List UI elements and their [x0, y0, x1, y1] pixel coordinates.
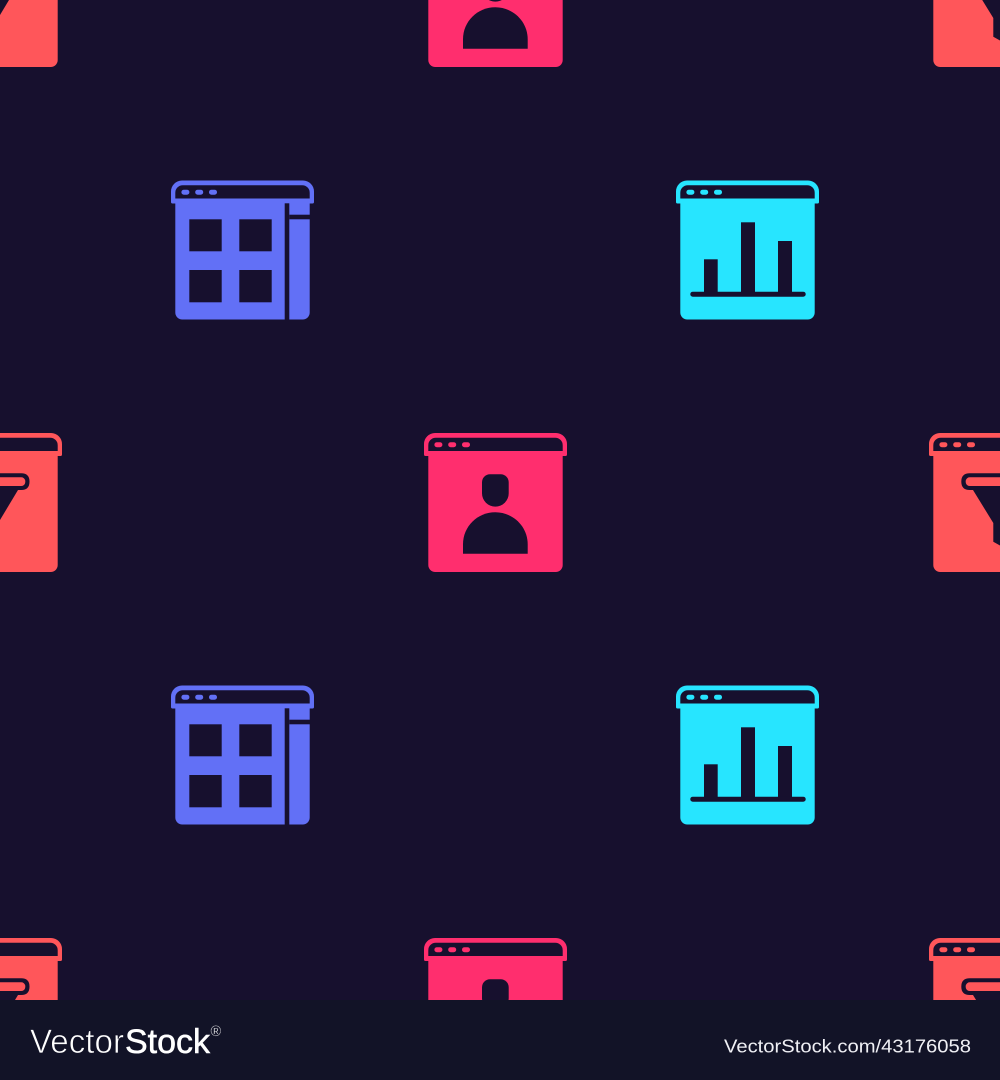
icon: funnel window, middle left — [0, 433, 62, 572]
icon: bar chart window, upper right — [676, 180, 819, 320]
footer bar — [0, 1000, 1000, 1080]
icon: person window, top centre — [424, 0, 567, 67]
footer logo: VectorStock — [30, 1023, 222, 1061]
icon: funnel window, bottom right — [929, 938, 1000, 1077]
icon: funnel window, bottom left — [0, 938, 62, 1077]
footer logo: VectorStock: Stock — [125, 1023, 211, 1061]
footer logo: VectorStock: Vector — [30, 1023, 124, 1061]
icon: funnel window, top left — [0, 0, 62, 67]
icon: table window, lower left — [171, 686, 314, 825]
icon: funnel window, middle right — [929, 433, 1000, 572]
icon: funnel window, top right — [929, 0, 1000, 67]
icon: table window, upper left — [171, 180, 314, 320]
icon: person window, bottom centre — [424, 938, 567, 1077]
icon: bar chart window, lower right — [676, 686, 819, 824]
footer image id: VectorStock.com/43176058 — [724, 1036, 971, 1057]
footer logo: VectorStock: ® — [210, 1024, 222, 1040]
icon: person window, centre — [424, 433, 567, 572]
